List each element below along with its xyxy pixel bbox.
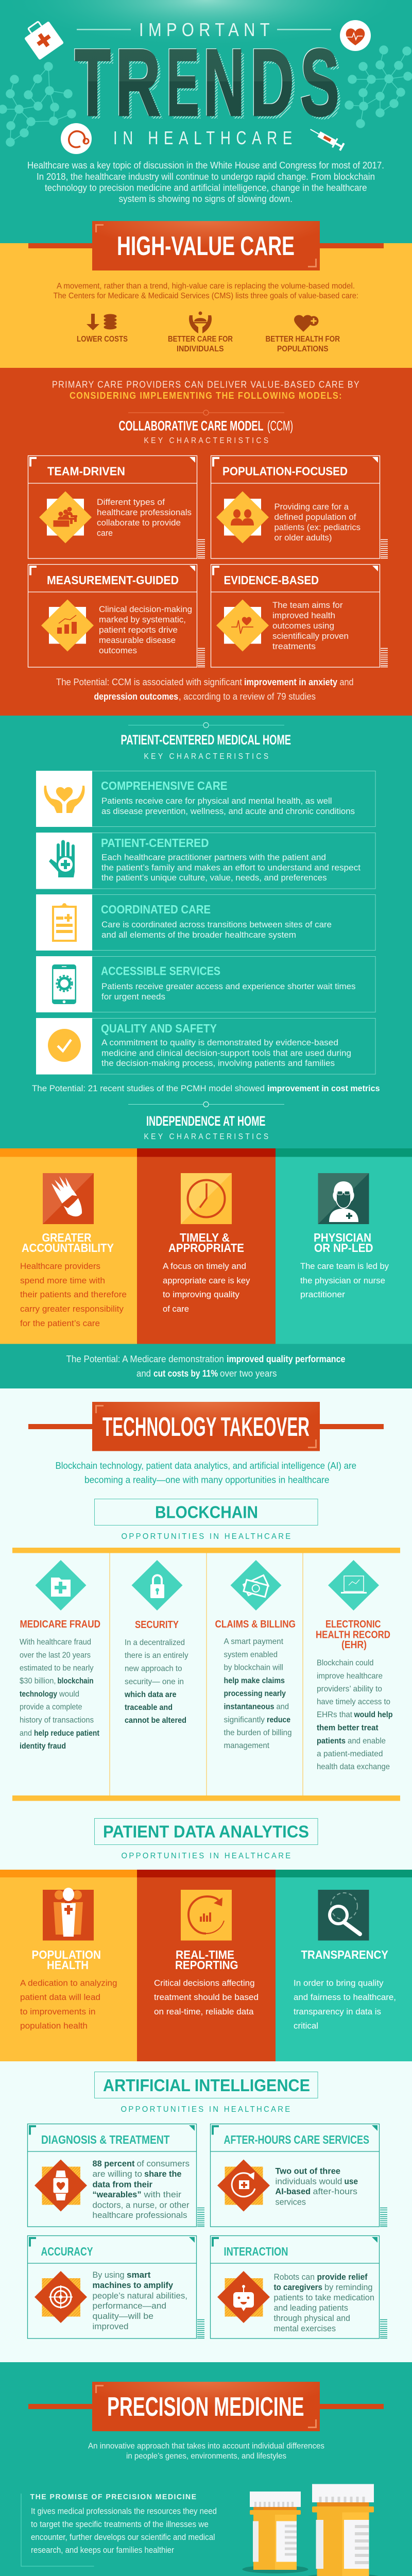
text block: precision medicine intro: in people’s genes, environments, and lifestyles — [126, 2452, 286, 2461]
goal: better health for populations: BETTER HEALTH FOR — [266, 335, 340, 344]
row: patient-centered: the patient’s unique culture, value, needs, and preferences — [101, 873, 327, 883]
column: security: In a decentralized — [125, 1638, 185, 1647]
card: diagnosis and treatment: data from their — [93, 2179, 152, 2190]
title word: TRENDS: S — [300, 30, 339, 136]
row: patient-centered — [36, 833, 375, 889]
callout: CCM potential: improvement in anxiety — [244, 677, 337, 687]
column: transparency — [276, 1870, 412, 2061]
molecule decoration right — [345, 46, 412, 128]
row: comprehensive care — [36, 771, 375, 827]
card: diagnosis and treatment: share the — [144, 2169, 181, 2179]
column: electronic health record: (EHR) — [341, 1639, 367, 1651]
column: timely and appropriate — [137, 1148, 276, 1344]
text block: the promise of precision medicine: THE PROMISE OF PRECISION MEDICINE — [30, 2493, 197, 2501]
heading: independence at home — [128, 1101, 284, 1141]
card: team-driven: TEAM-DRIVEN — [47, 465, 125, 478]
column: electronic health record: and enable — [348, 1737, 386, 1745]
title word: TRENDS: N — [203, 29, 244, 135]
column: real-time reporting: treatment should be based — [154, 1992, 259, 2002]
callout: independence at home potential — [66, 1354, 345, 1379]
icon: pill bottles — [242, 2484, 383, 2576]
column: electronic health record: health data exchange — [317, 1762, 390, 1771]
card: interaction: provide relief — [317, 2272, 368, 2282]
heading: collaborative care model — [118, 410, 293, 445]
card: after-hours care services: AI-based — [275, 2187, 311, 2196]
column: medicare fraud: MEDICARE FRAUD — [20, 1619, 100, 1630]
callout: PCMH potential: The Potential: 21 recent studies of the PCMH model showed — [32, 1083, 265, 1093]
callout: CCM potential: and — [340, 677, 353, 687]
column: greater accountability: their patients and therefore — [20, 1290, 127, 1299]
heading: primary care providers: CONSIDERING IMPLEMENTING THE FOLLOWING MODELS: — [70, 391, 342, 401]
callout: independence at home potential: and — [136, 1368, 151, 1379]
card: evidence-based: outcomes using — [272, 621, 334, 631]
title word: TRENDS: R — [115, 29, 160, 135]
card: interaction: patients to take medication — [274, 2293, 374, 2302]
card: team-driven: collaborate to provide — [97, 518, 181, 528]
text block: technology intro — [56, 1461, 356, 1485]
text block: high-value care intro: A movement, rather than a trend, high-value care is replacing the volume-based model. — [57, 282, 355, 291]
title word: TRENDS: R — [118, 33, 164, 139]
column: population health: HEALTH — [47, 1958, 89, 1972]
card: team-driven — [28, 455, 205, 558]
icon: first aid kit — [21, 16, 64, 60]
title: IN HEALTHCARE — [113, 127, 298, 148]
heading: patient-centered medical home — [121, 722, 291, 761]
row: accessible services — [36, 956, 375, 1012]
card: diagnosis and treatment: DIAGNOSIS & TREATMENT — [41, 2133, 170, 2146]
icon: heart monitor — [340, 20, 371, 51]
card: evidence-based: EVIDENCE-BASED — [224, 573, 319, 587]
card: interaction: INTERACTION — [224, 2245, 288, 2258]
icon: stethoscope — [61, 123, 92, 154]
heading: patient data analytics — [95, 1819, 318, 1860]
column: greater accountability: GREATER — [42, 1231, 92, 1244]
column: electronic health record: patients — [317, 1737, 346, 1745]
column: physician or NP-led: the physician or nurse — [300, 1276, 385, 1285]
card: interaction: by reminding — [324, 2282, 373, 2292]
card: evidence-based — [211, 565, 388, 667]
row: patient-centered: the patient’s family and makes an effort to understand and respect — [101, 862, 360, 873]
column: medicare fraud: over the last 20 years — [20, 1651, 91, 1660]
card: interaction — [210, 2236, 387, 2338]
goal: better care for individuals: BETTER CARE FOR — [168, 335, 233, 344]
title word: TRENDS: S — [303, 33, 342, 139]
column: medicare fraud: history of transactions — [20, 1716, 94, 1725]
column: security: there is an entirely — [125, 1651, 188, 1660]
heading banner: technology takeover — [28, 1402, 384, 1451]
column: claims and billing: management — [224, 1741, 270, 1750]
card: after-hours care services: use — [344, 2176, 358, 2187]
column: transparency: critical — [294, 2021, 318, 2031]
card: evidence-based: The team aims for — [272, 600, 343, 610]
column: medicare fraud: technology — [20, 1690, 57, 1699]
column: greater accountability: Healthcare providers — [20, 1261, 100, 1271]
column: claims and billing: processing nearly — [224, 1689, 286, 1698]
title word: TRENDS: N — [203, 30, 245, 136]
column: security: traceable and — [125, 1703, 173, 1712]
card: measurement-guided: MEASUREMENT-GUIDED — [47, 573, 179, 587]
card: diagnosis and treatment: with their — [143, 2190, 181, 2199]
card: evidence-based: improved health — [272, 611, 335, 620]
callout: independence at home potential: The Potential: A Medicare demonstration — [66, 1354, 224, 1364]
card: population-focused — [211, 455, 388, 558]
heading: collaborative care model: COLLABORATIVE CARE MODEL — [118, 418, 264, 434]
title word: TRENDS: D — [253, 33, 297, 139]
callout: independence at home potential: cut costs by 11% — [153, 1368, 218, 1379]
column: timely and appropriate: A focus on timely and — [163, 1261, 246, 1271]
heading: artificial intelligence: ARTIFICIAL INTELLIGENCE — [103, 2076, 310, 2095]
column: medicare fraud — [20, 1560, 100, 1751]
title word: TRENDS: E — [166, 30, 199, 136]
column: real-time reporting: REAL-TIME — [176, 1948, 234, 1961]
row: coordinated care: Care is coordinated across transitions between sites of care — [101, 920, 332, 929]
row: quality and safety: the decision-making process, involving patients and families — [101, 1058, 335, 1068]
column: population health: population health — [20, 2021, 88, 2031]
column: electronic health record — [316, 1560, 393, 1771]
column: electronic health record: EHRs that — [317, 1710, 353, 1719]
column: electronic health record: providers’ ability to — [317, 1685, 382, 1693]
column: transparency: transparency in data is — [294, 2007, 381, 2016]
column: claims and billing: CLAIMS & BILLING — [215, 1619, 296, 1630]
column: population health: POPULATION — [32, 1948, 101, 1961]
card: evidence-based: treatments — [272, 641, 316, 651]
card: measurement-guided: measurable disease — [99, 635, 176, 645]
column: real-time reporting: on real-time, reliable data — [154, 2007, 254, 2016]
card: measurement-guided: Clinical decision-making — [99, 604, 192, 614]
card: accuracy: people’s natural abilities, — [93, 2291, 187, 2301]
card: diagnosis and treatment: are willing to — [93, 2169, 142, 2179]
heading: blockchain: BLOCKCHAIN — [155, 1502, 258, 1522]
text block: high-value care intro: The Centers for Medicare & Medicaid Services (CMS) lists three goals of value-based care: — [54, 292, 358, 300]
heading: artificial intelligence — [95, 2072, 318, 2114]
row: coordinated care: and all elements of the broader healthcare system — [101, 930, 296, 940]
row: comprehensive care: as disease prevention, wellness, and acute and chronic conditions — [101, 806, 355, 816]
column: electronic health record: ELECTRONIC — [325, 1619, 381, 1630]
goal: better care for individuals — [168, 311, 233, 353]
callout: CCM potential: The Potential: CCM is associated with significant — [56, 677, 242, 687]
panel: blockchain opportunities — [12, 1548, 400, 1801]
column: medicare fraud: identity fraud — [20, 1742, 66, 1751]
row: accessible services: Patients receive greater access and experience shorter wait times — [101, 981, 355, 991]
column: medicare fraud: provide a complete — [20, 1703, 82, 1711]
row: quality and safety: QUALITY AND SAFETY — [101, 1022, 217, 1035]
column: population health: patient data will lead — [20, 1992, 100, 2002]
card: interaction: and leading patients — [274, 2303, 348, 2313]
goal: lower costs — [77, 314, 128, 344]
heading: patient-centered medical home: PATIENT-CENTERED MEDICAL HOME — [121, 732, 291, 748]
row: comprehensive care: COMPREHENSIVE CARE — [101, 779, 228, 792]
column: medicare fraud: would — [59, 1690, 79, 1699]
text block: precision medicine intro — [88, 2442, 324, 2461]
intro paragraph: technology to precision medicine and artificial intelligence, change in the healthcare — [45, 182, 367, 193]
title word: TRENDS: T — [78, 33, 114, 139]
heading: primary care providers — [52, 379, 360, 401]
card: team-driven: healthcare professionals — [97, 507, 192, 517]
card: interaction: mental exercises — [274, 2324, 336, 2333]
card: diagnosis and treatment: doctors, a nurse, or other — [93, 2200, 190, 2210]
column: claims and billing: help make claims — [224, 1676, 285, 1685]
column: electronic health record: a patient-mediated — [317, 1750, 383, 1758]
goal: better care for individuals: INDIVIDUALS — [177, 345, 224, 353]
heading: collaborative care model: (CCM) — [267, 418, 293, 434]
card: after-hours care services: AFTER-HOURS CARE SERVICES — [224, 2133, 369, 2146]
heading: blockchain: OPPORTUNITIES IN HEALTHCARE — [122, 1532, 293, 1541]
heading: blockchain — [95, 1499, 318, 1541]
column: timely and appropriate: APPROPRIATE — [168, 1241, 244, 1255]
column: transparency: TRANSPARENCY — [301, 1948, 388, 1961]
column: claims and billing: reduce — [267, 1716, 290, 1724]
text block: technology intro: becoming a reality—one with many opportunities in healthcare — [84, 1475, 330, 1485]
title word: TRENDS: E — [169, 33, 202, 139]
title: IMPORTANT — [139, 19, 274, 40]
title — [74, 19, 342, 148]
title word: TRENDS: D — [250, 30, 294, 136]
column: medicare fraud: and — [20, 1729, 32, 1738]
text block: technology intro: Blockchain technology, patient data analytics, and artificial intelligence (AI) are — [56, 1461, 356, 1471]
card: population-focused: or older adults) — [274, 533, 332, 543]
column: claims and billing: significantly — [224, 1716, 265, 1724]
heading: primary care providers: PRIMARY CARE PROVIDERS CAN DELIVER VALUE-BASED CARE BY — [52, 379, 360, 389]
title word: TRENDS: T — [74, 29, 110, 135]
card: accuracy: machines to amplify — [93, 2280, 174, 2290]
heading: patient data analytics: OPPORTUNITIES IN HEALTHCARE — [122, 1852, 293, 1860]
column: real-time reporting: REPORTING — [175, 1958, 238, 1972]
heading: patient-centered medical home: KEY CHARACTERISTICS — [144, 752, 271, 761]
column: electronic health record: Blockchain could — [317, 1659, 374, 1667]
card: accuracy: ACCURACY — [41, 2245, 93, 2258]
column: real-time reporting — [137, 1870, 276, 2061]
column: greater accountability: spend more time with — [20, 1276, 105, 1285]
card: after-hours care services: individuals would — [275, 2176, 342, 2187]
text block: the promise of precision medicine — [21, 2493, 217, 2566]
card: diagnosis and treatment: of consumers — [137, 2159, 190, 2168]
text block: precision medicine intro: An innovative approach that takes into account individual differences — [88, 2442, 324, 2450]
column: claims and billing: A smart payment — [224, 1637, 284, 1646]
heading banner: precision medicine — [28, 2382, 384, 2431]
card: after-hours care services: services — [275, 2197, 306, 2207]
heading: artificial intelligence: OPPORTUNITIES IN HEALTHCARE — [121, 2105, 291, 2114]
callout: CCM potential — [56, 677, 353, 702]
molecule decoration left — [0, 62, 76, 146]
row: quality and safety: medicine and clinical decision-support tools that are used during — [101, 1048, 351, 1058]
heading banner: high-value care: HIGH-VALUE CARE — [117, 231, 295, 261]
column: population health — [0, 1870, 137, 2061]
heading: independence at home: KEY CHARACTERISTICS — [144, 1132, 271, 1141]
intro paragraph: Healthcare was a key topic of discussion in the White House and Congress for most of 2017. — [27, 160, 384, 171]
column: medicare fraud: blockchain — [58, 1676, 94, 1686]
card: population-focused: Providing care for a — [274, 502, 349, 512]
row: patient-centered: Each healthcare practitioner partners with the patient and — [101, 852, 326, 862]
title word: TRENDS — [74, 29, 342, 139]
card: after-hours care services: after-hours — [313, 2187, 357, 2196]
row: accessible services: ACCESSIBLE SERVICES — [101, 964, 220, 978]
card: measurement-guided: marked by systematic, — [99, 615, 186, 624]
text block: the promise of precision medicine: to target the specific treatments of the illnesses we — [31, 2519, 209, 2529]
column: electronic health record: improve healthcare — [317, 1672, 383, 1681]
title word: TRENDS: R — [115, 30, 161, 136]
card: evidence-based: scientifically proven — [272, 631, 349, 641]
column: security: new approach to — [125, 1664, 182, 1673]
icon: syringe — [308, 125, 345, 152]
column: claims and billing: system enabled — [224, 1651, 278, 1659]
card: team-driven: care — [97, 528, 113, 538]
card: diagnosis and treatment: 88 percent — [93, 2159, 135, 2168]
column: security: which data are — [124, 1690, 177, 1699]
column: security — [124, 1560, 188, 1725]
callout: PCMH potential — [32, 1083, 380, 1093]
column: timely and appropriate: TIMELY & — [180, 1231, 230, 1244]
row: coordinated care — [36, 894, 375, 951]
column: medicare fraud: estimated to be nearly — [20, 1664, 94, 1672]
column: greater accountability: ACCOUNTABILITY — [22, 1241, 114, 1255]
column: claims and billing: the burden of billing — [224, 1728, 291, 1737]
card: measurement-guided: outcomes — [99, 646, 137, 655]
text block: the promise of precision medicine: research, and keeps our families healthier — [31, 2545, 174, 2555]
row: quality and safety — [36, 1018, 375, 1075]
column: real-time reporting: Critical decisions affecting — [154, 1978, 254, 1988]
callout: CCM potential: depression outcomes — [94, 691, 178, 702]
column: claims and billing: instantaneous — [224, 1702, 274, 1711]
column: medicare fraud: With healthcare fraud — [20, 1638, 91, 1647]
card: interaction: through physical and — [274, 2313, 350, 2323]
goal: better health for populations — [266, 315, 340, 353]
card: population-focused: POPULATION-FOCUSED — [222, 465, 348, 478]
text block: high-value care intro — [54, 282, 358, 300]
column: greater accountability: carry greater responsibility — [20, 1304, 124, 1314]
card: after-hours care services: Two out of three — [275, 2166, 340, 2176]
row: accessible services: for urgent needs — [101, 992, 165, 1002]
column: physician or NP-led — [276, 1148, 412, 1344]
column: population health: to improvements in — [20, 2007, 96, 2016]
row: coordinated care: COORDINATED CARE — [101, 903, 211, 916]
column: greater accountability: for the patient’s care — [20, 1318, 100, 1328]
title word: TRENDS: E — [166, 29, 199, 135]
card: diagnosis and treatment — [28, 2124, 204, 2227]
column: timely and appropriate: to improving quality — [163, 1290, 239, 1299]
column: timely and appropriate: appropriate care is key — [163, 1276, 250, 1285]
card: interaction: Robots can — [274, 2272, 315, 2282]
column: transparency: and fairness to healthcare, — [294, 1992, 396, 2002]
column: medicare fraud: $30 billion, — [20, 1676, 56, 1686]
column: claims and billing — [215, 1560, 296, 1750]
card: after-hours care services — [210, 2124, 387, 2227]
column: security: security— one in — [125, 1677, 184, 1686]
column: physician or NP-led: OR NP-LED — [314, 1241, 373, 1255]
heading banner: high-value care — [28, 221, 384, 270]
heading: patient data analytics: PATIENT DATA ANALYTICS — [103, 1822, 309, 1841]
text block: the promise of precision medicine: encounter, further develops our scientific and medical — [31, 2532, 215, 2542]
column: electronic health record: them better treat — [317, 1724, 379, 1732]
goal: lower costs: LOWER COSTS — [77, 335, 128, 344]
row: quality and safety: A commitment to quality is demonstrated by evidence-based — [101, 1038, 338, 1047]
row: patient-centered: PATIENT-CENTERED — [101, 836, 209, 850]
column: electronic health record: have timely access to — [317, 1698, 390, 1706]
card: diagnosis and treatment: healthcare professionals — [93, 2210, 187, 2220]
row: comprehensive care: Patients receive care for physical and mental health, as well — [101, 796, 332, 806]
intro paragraph: system is showing no signs of slowing down. — [118, 194, 293, 204]
heading banner: precision medicine: PRECISION MEDICINE — [107, 2392, 304, 2422]
callout: CCM potential: , according to a review of 79 studies — [179, 691, 316, 702]
card: accuracy: performance—and — [93, 2301, 166, 2311]
column: electronic health record: would help — [354, 1710, 393, 1719]
intro paragraph — [27, 160, 384, 204]
column: greater accountability — [0, 1148, 137, 1344]
column: physician or NP-led: PHYSICIAN — [314, 1231, 371, 1244]
title word: TRENDS: T — [75, 30, 111, 136]
card: measurement-guided: patient reports drive — [99, 625, 178, 635]
title word: TRENDS: D — [250, 29, 294, 135]
column: security: cannot be altered — [125, 1716, 186, 1725]
heading: collaborative care model: KEY CHARACTERISTICS — [144, 436, 271, 445]
column: physician or NP-led: practitioner — [300, 1290, 345, 1299]
column: claims and billing: by blockchain will — [224, 1663, 283, 1672]
title word: TRENDS: S — [300, 29, 339, 135]
card: accuracy: smart — [127, 2270, 151, 2280]
column: population health: A dedication to analyzing — [20, 1978, 117, 1988]
card: team-driven: Different types of — [97, 497, 165, 507]
card: accuracy: By using — [93, 2270, 125, 2280]
callout: independence at home potential: improved quality performance — [227, 1354, 345, 1364]
column: transparency: In order to bring quality — [294, 1978, 384, 1988]
card: diagnosis and treatment: “wearables” — [93, 2190, 141, 2199]
column: medicare fraud: help reduce patient — [34, 1729, 100, 1738]
callout: independence at home potential: over two years — [220, 1368, 277, 1379]
card: accuracy — [28, 2236, 204, 2338]
column: electronic health record: HEALTH RECORD — [316, 1629, 390, 1640]
column: claims and billing: and — [276, 1702, 289, 1711]
title word: TRENDS: N — [207, 33, 248, 139]
column: security: SECURITY — [135, 1619, 179, 1631]
card: accuracy: quality—will be — [93, 2311, 153, 2321]
card: accuracy: improved — [93, 2321, 129, 2331]
card: population-focused: defined population of — [274, 512, 356, 522]
card: population-focused: patients (ex: pediatrics — [274, 522, 360, 532]
callout: PCMH potential: improvement in cost metrics — [267, 1083, 380, 1093]
card: measurement-guided — [28, 565, 205, 667]
column: physician or NP-led: The care team is led by — [300, 1261, 389, 1271]
card: interaction: to caregivers — [274, 2282, 322, 2292]
heading: independence at home: INDEPENDENCE AT HOME — [146, 1113, 266, 1129]
text block: the promise of precision medicine: It gives medical professionals the resources they need — [31, 2506, 217, 2516]
goal: better health for populations: POPULATIONS — [277, 345, 329, 353]
column: timely and appropriate: of care — [163, 1304, 189, 1314]
intro paragraph: In 2018, the healthcare industry will continue to undergo rapid change. From blockchain — [37, 172, 375, 182]
